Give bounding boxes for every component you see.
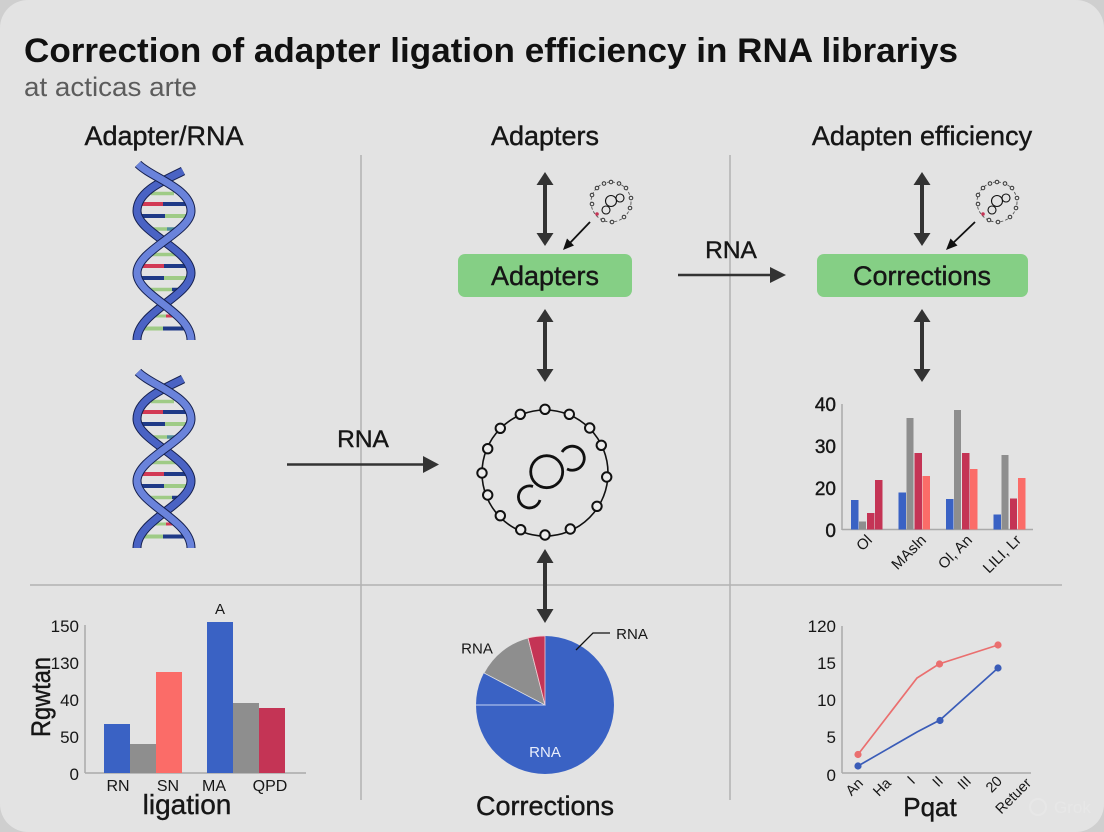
chart: line chart: 5 bbox=[827, 728, 836, 747]
subtitle: at acticas arte bbox=[24, 72, 197, 102]
chart: line chart bbox=[808, 617, 1035, 822]
chart: pie: RNA bbox=[616, 626, 648, 643]
chart: line chart: 20 bbox=[983, 774, 1006, 796]
chart: bar chart bottom left: 0 bbox=[70, 765, 79, 784]
double arrow: heading to corrections box bbox=[914, 172, 930, 246]
double arrow: heading to adapters box bbox=[536, 172, 554, 246]
chart: grouped bars right: MAsln bbox=[888, 532, 930, 573]
chart: grouped bars right: Ol, An bbox=[935, 532, 976, 573]
double arrow: corrections box to chart bbox=[914, 309, 930, 382]
heading: Adapten efficiency: Adapten efficiency bbox=[812, 121, 1033, 151]
box: Corrections bbox=[817, 254, 1028, 297]
chart: bar chart bottom left bbox=[26, 601, 306, 820]
icon: DNA helix bottom bbox=[137, 372, 191, 548]
box: Corrections: Corrections bbox=[853, 261, 991, 291]
chart: pie bbox=[461, 626, 648, 774]
chart: grouped bars right: 40 bbox=[815, 395, 836, 416]
chart: line chart: Retuer bbox=[993, 775, 1035, 818]
chart: grouped bars right: 20 bbox=[815, 479, 836, 500]
arrow: RNA to circular adapter bbox=[287, 456, 439, 473]
chart: line chart: 0 bbox=[827, 766, 836, 785]
chart: bar chart bottom left: ligation bbox=[143, 789, 231, 820]
arrow: RNA to corrections bbox=[678, 267, 786, 283]
chart: pie: RNA bbox=[461, 640, 493, 658]
chart: bar chart bottom left: RN bbox=[106, 778, 130, 795]
chart: bar chart bottom left: SN bbox=[157, 778, 179, 795]
icon: large ring bbox=[477, 405, 611, 540]
chart: line chart: II bbox=[930, 774, 947, 791]
chart: bar chart bottom left: MA bbox=[202, 778, 226, 795]
chart: line chart: An bbox=[843, 776, 867, 799]
chart: bar chart bottom left: QPD bbox=[253, 778, 287, 795]
chart: bar chart bottom left: A bbox=[215, 601, 225, 618]
heading: Corrections: Corrections bbox=[476, 791, 614, 821]
chart: grouped bars right: 30 bbox=[815, 437, 836, 458]
chart: line chart: Ha bbox=[870, 775, 895, 800]
label: RNA upper arrow: RNA bbox=[705, 237, 758, 264]
chart: pie: RNA bbox=[529, 744, 561, 761]
box: Adapters: Adapters bbox=[491, 261, 599, 291]
chart: grouped bars right: 0 bbox=[825, 521, 836, 542]
icon: small ring centre bbox=[590, 180, 633, 224]
chart: line chart: III bbox=[955, 774, 975, 793]
chart: bar chart bottom left: Rgwtan bbox=[26, 657, 56, 737]
chart: line chart: 10 bbox=[817, 691, 836, 710]
chart: bar chart bottom left: 150 bbox=[51, 617, 79, 636]
heading: Adapters: Adapters bbox=[491, 121, 599, 151]
chart: bar chart bottom left: 40 bbox=[60, 691, 79, 710]
box: Adapters bbox=[458, 254, 632, 297]
heading: Adapter/RNA: Adapter/RNA bbox=[84, 121, 244, 151]
chart: grouped bars right: LILI, Lr bbox=[980, 532, 1025, 577]
chart: bar chart bottom left: 130 bbox=[51, 654, 79, 673]
chart: grouped bars right: Ol bbox=[853, 532, 876, 554]
chart: bar chart bottom left: 50 bbox=[60, 728, 79, 747]
double arrow: adapters box to ring bbox=[536, 309, 554, 382]
chart: line chart: 15 bbox=[817, 654, 836, 673]
watermark: Grok bbox=[1054, 798, 1091, 817]
chart: line chart: 120 bbox=[808, 617, 836, 636]
watermark bbox=[1030, 798, 1091, 817]
chart: line chart: Pqat bbox=[903, 792, 958, 822]
double arrow: ring to pie bbox=[536, 549, 554, 623]
title: Correction of adapter ligation efficiency in RNA librariys bbox=[24, 32, 958, 70]
arrow: small ring to corrections box bbox=[946, 222, 975, 250]
chart: grouped bars right bbox=[815, 395, 1033, 577]
arrow: small ring to adapters box bbox=[563, 222, 590, 250]
icon: DNA helix top bbox=[137, 164, 191, 340]
label: RNA lower arrow: RNA bbox=[337, 426, 390, 453]
chart: line chart: I bbox=[905, 774, 919, 788]
icon: small ring right bbox=[976, 180, 1019, 224]
